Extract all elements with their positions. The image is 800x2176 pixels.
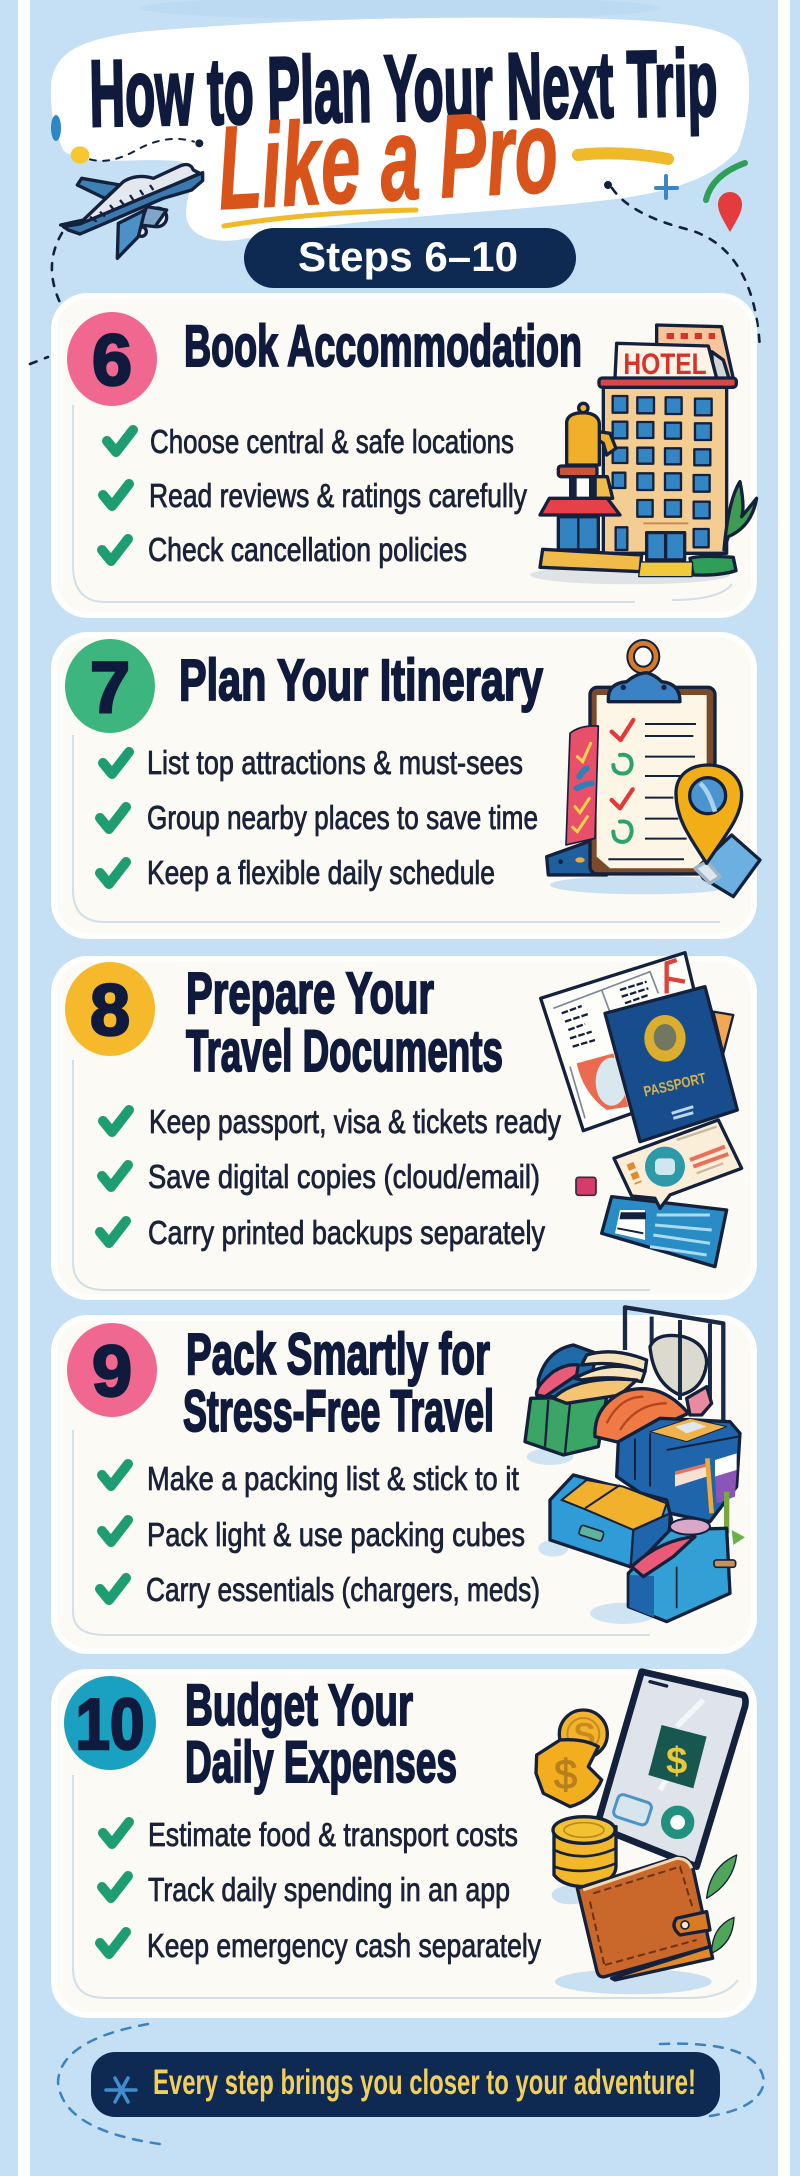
icon: passport and travel documents xyxy=(541,953,742,1267)
header: title blob and route decoration xyxy=(30,18,760,364)
heading: Budget Your xyxy=(185,1673,413,1738)
checklist: Save digital copies (cloud/email) xyxy=(148,1158,540,1195)
heading: Prepare Your xyxy=(186,961,434,1026)
number badge 10: 10 xyxy=(76,1685,144,1765)
number badge 7 xyxy=(65,639,155,733)
heading: Plan Your Itinerary xyxy=(179,648,543,713)
icon: red map pin xyxy=(718,192,742,232)
checklist: Carry printed backups separately xyxy=(148,1214,545,1251)
checklist xyxy=(100,1460,540,1608)
heading: Pack Smartly for xyxy=(186,1322,490,1387)
checklist: Make a packing list & stick to it xyxy=(147,1460,519,1497)
checklist: Keep emergency cash separately xyxy=(147,1927,541,1964)
dashed loop xyxy=(58,2024,764,2144)
heading: Book Accommodation xyxy=(184,314,582,379)
heading: Travel Documents xyxy=(186,1019,503,1084)
panel: step 8 xyxy=(54,953,754,1297)
number badge 8: 8 xyxy=(90,971,130,1051)
icon: plane xyxy=(61,139,203,258)
checklist: Estimate food & transport costs xyxy=(148,1816,518,1853)
number badge 9: 9 xyxy=(92,1332,132,1412)
checklist xyxy=(100,1103,561,1251)
checklist: List top attractions & must-sees xyxy=(147,744,523,781)
panel: step 10 xyxy=(54,1672,754,2015)
star accent xyxy=(106,2078,136,2102)
checklist: Keep a flexible daily schedule xyxy=(147,854,495,891)
panel: step 7 xyxy=(54,635,760,936)
panel: step 6 xyxy=(54,296,757,615)
title background blob xyxy=(51,18,749,241)
route end dot xyxy=(604,181,612,189)
checklist xyxy=(100,1816,541,1964)
checklist: Read reviews & ratings carefully xyxy=(149,477,527,514)
checklist: Carry essentials (chargers, meds) xyxy=(146,1571,540,1608)
number badge 9 xyxy=(67,1323,157,1417)
number badge 8 xyxy=(65,962,155,1056)
heading: Daily Expenses xyxy=(185,1730,457,1795)
heading xyxy=(183,1322,494,1444)
heading: Stress-Free Travel xyxy=(183,1379,494,1444)
blue blotch xyxy=(51,115,61,141)
icon: passport and travel documents: PASSPORT xyxy=(642,1071,708,1101)
route dashes xyxy=(30,188,760,364)
footer banner xyxy=(58,2024,764,2144)
checklist: Track daily spending in an app xyxy=(148,1871,510,1908)
icon: hotel xyxy=(530,325,757,584)
heading xyxy=(185,1673,457,1795)
blue plus xyxy=(656,176,677,198)
icon: phone, coins and wallet: $ xyxy=(666,1739,687,1782)
number badge 7: 7 xyxy=(90,648,130,728)
checklist: Group nearby places to save time xyxy=(147,799,538,836)
icon: hotel: HOTEL xyxy=(623,348,707,381)
icon: luggage xyxy=(525,1307,745,1624)
checklist: Keep passport, visa & tickets ready xyxy=(149,1103,561,1140)
badge: steps xyxy=(244,228,576,288)
icon: phone, coins and wallet: $ xyxy=(554,1750,577,1797)
icon: phone, coins and wallet: S xyxy=(573,1717,596,1754)
checklist xyxy=(100,744,538,891)
green arc xyxy=(706,163,745,200)
number badge 6: 6 xyxy=(92,321,132,401)
checklist: Pack light & use packing cubes xyxy=(147,1516,525,1553)
checklist xyxy=(102,423,527,568)
yellow dash xyxy=(578,153,668,159)
number badge 6 xyxy=(67,312,157,406)
badge: steps: Steps 6–10 xyxy=(298,233,518,280)
checklist: Choose central & safe locations xyxy=(150,423,514,460)
heading xyxy=(186,961,503,1084)
icon: clipboard with location pin xyxy=(547,643,760,897)
icon: phone, coins and wallet xyxy=(536,1672,746,1994)
title line two: Like a Pro xyxy=(214,85,561,235)
checklist: Check cancellation policies xyxy=(148,531,467,568)
yellow underline xyxy=(224,210,416,226)
panel: step 9 xyxy=(54,1307,754,1651)
